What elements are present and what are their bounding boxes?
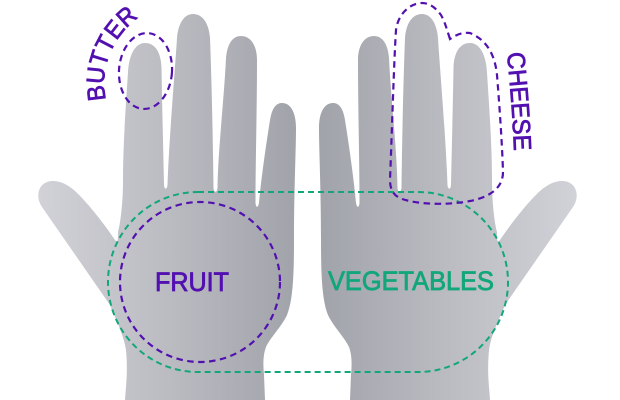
label: cheese: CHEESE (507, 52, 532, 150)
label: butter: BUTTER (86, 7, 138, 100)
right hand (319, 14, 577, 400)
label: vegetables: VEGETABLES (328, 266, 494, 296)
left hand (38, 14, 296, 400)
fruit portion outline (120, 202, 280, 362)
butter portion outline (116, 31, 175, 111)
label: fruit: FRUIT (155, 267, 229, 297)
cheese portion outline (390, 3, 503, 204)
vegetables portion outline (108, 192, 508, 372)
